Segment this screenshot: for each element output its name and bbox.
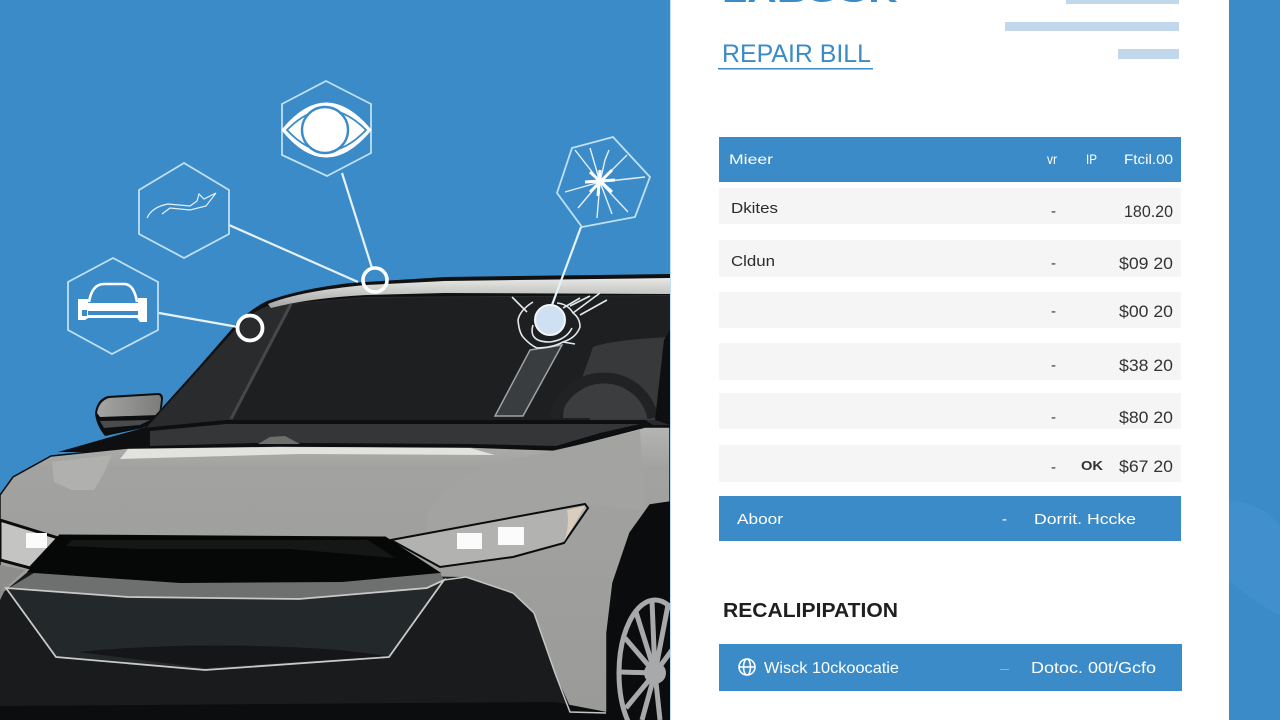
icon: scratch hexagon xyxy=(139,163,229,258)
heading: recapitulation: RECALIPIPATION xyxy=(723,600,898,622)
right blue strip highlight xyxy=(1229,500,1280,615)
table row 1: Dkites xyxy=(731,200,778,217)
table row 5 xyxy=(719,393,1181,429)
table row 2: - xyxy=(1051,255,1056,272)
table row 3: - xyxy=(1051,303,1056,320)
car: lower body edge highlight xyxy=(444,577,606,713)
car: inner glass panel xyxy=(231,296,670,420)
table footer: Dorrit. Hccke xyxy=(1034,511,1136,528)
table row 3 xyxy=(719,292,1181,328)
car: wheel arch and tyre xyxy=(607,502,670,720)
car: grey bumper band xyxy=(9,573,444,599)
table row 5: $80 20 xyxy=(1119,408,1173,427)
car: windshield reflection strip xyxy=(495,345,562,416)
car: wheel rim xyxy=(619,600,691,720)
table footer: - xyxy=(1002,511,1007,528)
table row 6: - xyxy=(1051,459,1056,476)
summary bar xyxy=(719,644,1182,691)
table header: Ftcil.00 xyxy=(1124,151,1173,167)
summary bar: Dotoc. 00t/Gcfo xyxy=(1031,660,1156,677)
table row 4: $38 20 xyxy=(1119,356,1173,375)
table header: Mieer xyxy=(729,151,773,167)
table row 1: - xyxy=(1051,203,1056,220)
car: hood highlights xyxy=(52,430,645,540)
table header: IP xyxy=(1086,151,1097,167)
car: silver body and hood xyxy=(0,427,670,720)
connector lines xyxy=(159,173,581,327)
icon: shattered glass hexagon xyxy=(557,137,650,227)
table footer: Aboor xyxy=(737,511,783,528)
table row 5: - xyxy=(1051,409,1056,426)
table row 4 xyxy=(719,343,1181,380)
panel: repair bill xyxy=(670,0,1229,720)
table row 6: OK xyxy=(1081,458,1104,473)
table row 2: Cldun xyxy=(731,253,775,270)
car illustration xyxy=(0,274,691,720)
table header xyxy=(719,137,1181,182)
table row 2 xyxy=(719,240,1181,277)
car: upper grille xyxy=(30,536,437,583)
car: right headlight xyxy=(391,504,588,567)
table row 4: - xyxy=(1051,357,1056,374)
car: left body piece xyxy=(0,565,25,600)
icon: globe xyxy=(739,659,755,675)
car: lower bumper xyxy=(0,570,607,720)
table row 6: $67 20 xyxy=(1119,457,1173,476)
heading: repair bill: REPAIR BILL xyxy=(722,40,871,68)
table row 2: $09 20 xyxy=(1119,254,1173,273)
marker: windshield top xyxy=(363,268,387,292)
car: side mirror xyxy=(95,393,163,436)
icon: car hexagon xyxy=(68,258,158,354)
placeholder bars xyxy=(1005,0,1179,59)
car: lower grille xyxy=(6,580,444,670)
car: roof trim xyxy=(268,278,670,308)
table row 3: $00 20 xyxy=(1119,302,1173,321)
car: interior seat and steering wheel xyxy=(555,330,670,425)
windshield crack impact xyxy=(512,293,607,348)
table row 6 xyxy=(719,445,1181,482)
marker: pillar xyxy=(238,316,262,340)
summary bar: Wisck 10ckoocatie xyxy=(764,660,899,677)
car: roof and windshield frame xyxy=(142,274,670,430)
icon: eye hexagon xyxy=(282,81,371,176)
car: dark cowl below windshield xyxy=(58,420,658,452)
table row 1: 180.20 xyxy=(1124,202,1173,221)
table row 1 xyxy=(719,188,1181,224)
table footer xyxy=(719,496,1181,541)
car: left headlight xyxy=(0,520,58,568)
table header: vr xyxy=(1047,151,1057,167)
